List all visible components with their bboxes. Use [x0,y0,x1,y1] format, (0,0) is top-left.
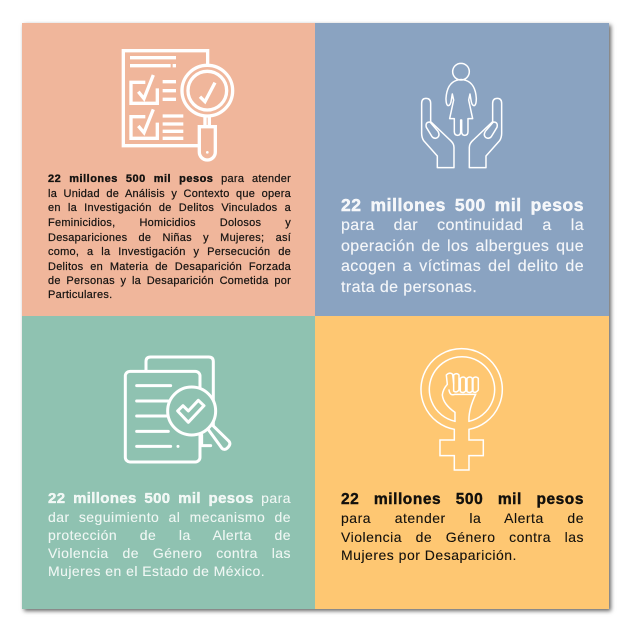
text block: yellow panel: Violencia de Género contra las [341,529,584,545]
text block: peach panel: la Unidad de Análisis y Contexto que opera [48,188,291,200]
text block: peach panel: Delitos en Materia de Desaparición Forzada [48,261,291,273]
text block: peach panel: Feminicidios, Homicidios Dolosos y [48,217,291,229]
text block: peach panel: de Personas y la Desaparición Cometida por [48,275,291,287]
text block: blue panel: trata de personas. [341,279,477,296]
text block: blue panel [341,195,584,296]
text block: green panel [48,490,291,579]
text block: blue panel: para dar continuidad a la [341,217,584,234]
icon: hands holding a woman [422,63,502,168]
text block: green panel: dar seguimiento al mecanismo de [48,509,291,525]
icon: venus symbol with raised fist [421,349,502,470]
text block: green panel: protección de la Alerta de [48,527,291,543]
panel: yellow background [315,316,609,609]
text block: peach panel [48,173,291,301]
icon: documents with magnifier and check [125,357,230,462]
text block: peach panel: como, a la Investigación y Persecución de [48,246,291,258]
text block: blue panel: acogen a víctimas del delito de [341,258,584,275]
text block: peach panel: Desapariciones de Niñas y Mujeres; así [48,232,291,244]
text block: peach panel: 22 millones 500 mil pesos para atender [48,173,291,185]
text block: yellow panel: para atender la Alerta de [341,510,584,526]
text block: green panel: Mujeres en el Estado de México. [48,563,265,579]
text block: yellow panel: Mujeres por Desaparición. [341,547,517,563]
panel: peach background [22,23,315,316]
text block: green panel: 22 millones 500 mil pesos para [48,490,291,506]
text block: blue panel: 22 millones 500 mil pesos [341,195,584,215]
icon: checklist with magnifier [123,51,233,160]
panel: blue background [315,23,609,316]
text block: peach panel: Particulares. [48,289,112,301]
text block: peach panel: en la Investigación de Delitos Vinculados a [48,202,291,214]
text block: blue panel: operación de los albergues que [341,238,584,255]
text block: green panel: Violencia de Género contra las [48,545,291,561]
text block: yellow panel: 22 millones 500 mil pesos [341,491,584,508]
panel: green background [22,316,315,609]
text block: yellow panel [341,491,584,563]
